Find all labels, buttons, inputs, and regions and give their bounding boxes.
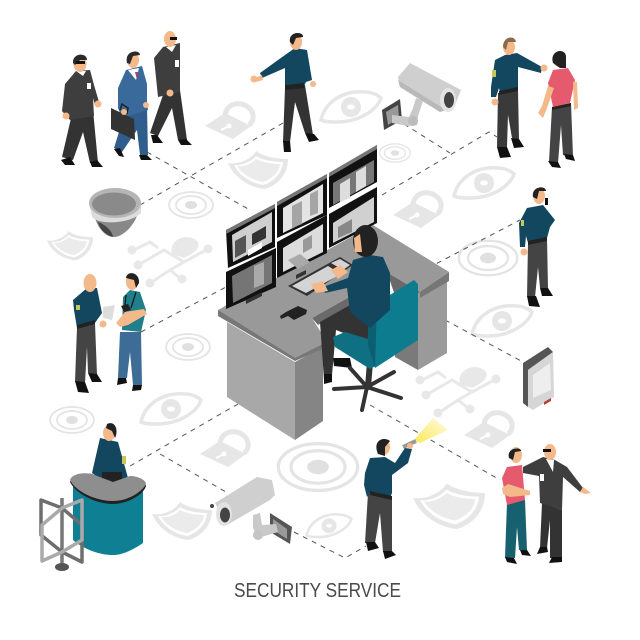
man in blue suit with briefcase xyxy=(111,51,152,160)
reception desk with guard and turnstile xyxy=(41,423,146,571)
security camera, bottom xyxy=(210,477,292,544)
operator legs xyxy=(320,305,380,384)
dome camera xyxy=(89,188,141,237)
motion sensor xyxy=(523,347,554,410)
pair: man in red shirt and man in black suit, bottom right xyxy=(502,444,591,564)
guard with flashlight xyxy=(364,418,448,559)
guard on the radio, right xyxy=(519,187,555,307)
monitor wall xyxy=(226,145,377,309)
desk top xyxy=(218,225,449,361)
turnstile xyxy=(41,498,82,571)
counter xyxy=(70,473,146,555)
operator at desk: monitors, desk, chair xyxy=(218,145,449,440)
radio on desk xyxy=(280,306,307,320)
keyboard xyxy=(288,257,353,296)
pair: guard and man in red shirt, top right xyxy=(491,38,578,168)
background icons xyxy=(47,92,532,540)
dashed connector lines xyxy=(130,123,523,558)
bald man in dark suit xyxy=(150,31,192,145)
guard pointing, top centre xyxy=(250,33,319,152)
operator torso and head xyxy=(311,225,390,328)
guard behind counter xyxy=(92,423,128,484)
desk pedestal, right xyxy=(395,275,447,370)
pair: guard and man with camera, left xyxy=(73,273,147,393)
man in dark suit, left xyxy=(61,55,103,167)
chair xyxy=(333,280,418,410)
desk pedestal, left xyxy=(227,322,323,440)
security camera, top right xyxy=(382,63,461,130)
people: three men walking xyxy=(61,31,192,167)
title: SECURITY SERVICE xyxy=(234,580,401,602)
